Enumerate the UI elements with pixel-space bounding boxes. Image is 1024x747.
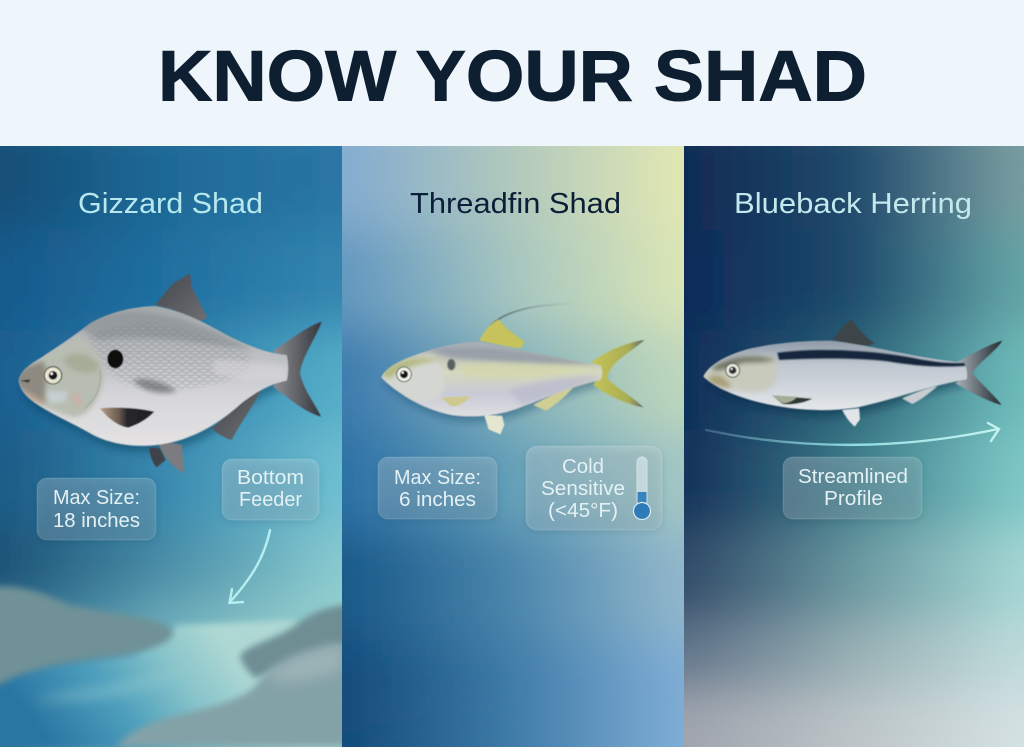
card: cold sensitive: Sensitive (541, 478, 625, 500)
card: streamlined profile: Profile (824, 488, 883, 510)
panel: blueback herring (684, 146, 1024, 747)
card: max size 6 inches: Max Size: (394, 467, 481, 489)
card: cold sensitive (526, 446, 662, 532)
arrow: down to bottom (230, 530, 270, 603)
card: bottom feeder: Feeder (239, 489, 302, 511)
fish: blueback herring (697, 319, 1002, 427)
card: bottom feeder: Bottom (237, 467, 304, 489)
card: max size 18 inches (37, 478, 156, 542)
card: streamlined profile (783, 457, 922, 521)
card: cold sensitive: Cold (562, 456, 604, 478)
card: max size 6 inches (378, 457, 497, 521)
icon: thermometer (634, 457, 650, 520)
panel: gizzard shad (0, 146, 342, 747)
fish: threadfin shad (379, 303, 645, 434)
river bed scene (0, 586, 353, 747)
card: streamlined profile: Streamlined (798, 466, 908, 488)
panel: threadfin shad (342, 146, 684, 747)
card: max size 18 inches: 18 inches (53, 510, 140, 532)
card: bottom feeder (222, 459, 319, 522)
heading: Gizzard Shad (78, 188, 263, 220)
card: cold sensitive: (<45°F) (548, 500, 618, 522)
fish: gizzard shad (13, 273, 322, 473)
card: max size 18 inches: Max Size: (53, 487, 140, 509)
heading: Threadfin Shad (410, 188, 621, 220)
card: max size 6 inches: 6 inches (399, 489, 476, 511)
arrow: streamlined motion (706, 423, 999, 445)
title: KNOW YOUR SHAD (158, 38, 867, 116)
title banner (0, 0, 1024, 146)
heading: Blueback Herring (734, 188, 972, 220)
